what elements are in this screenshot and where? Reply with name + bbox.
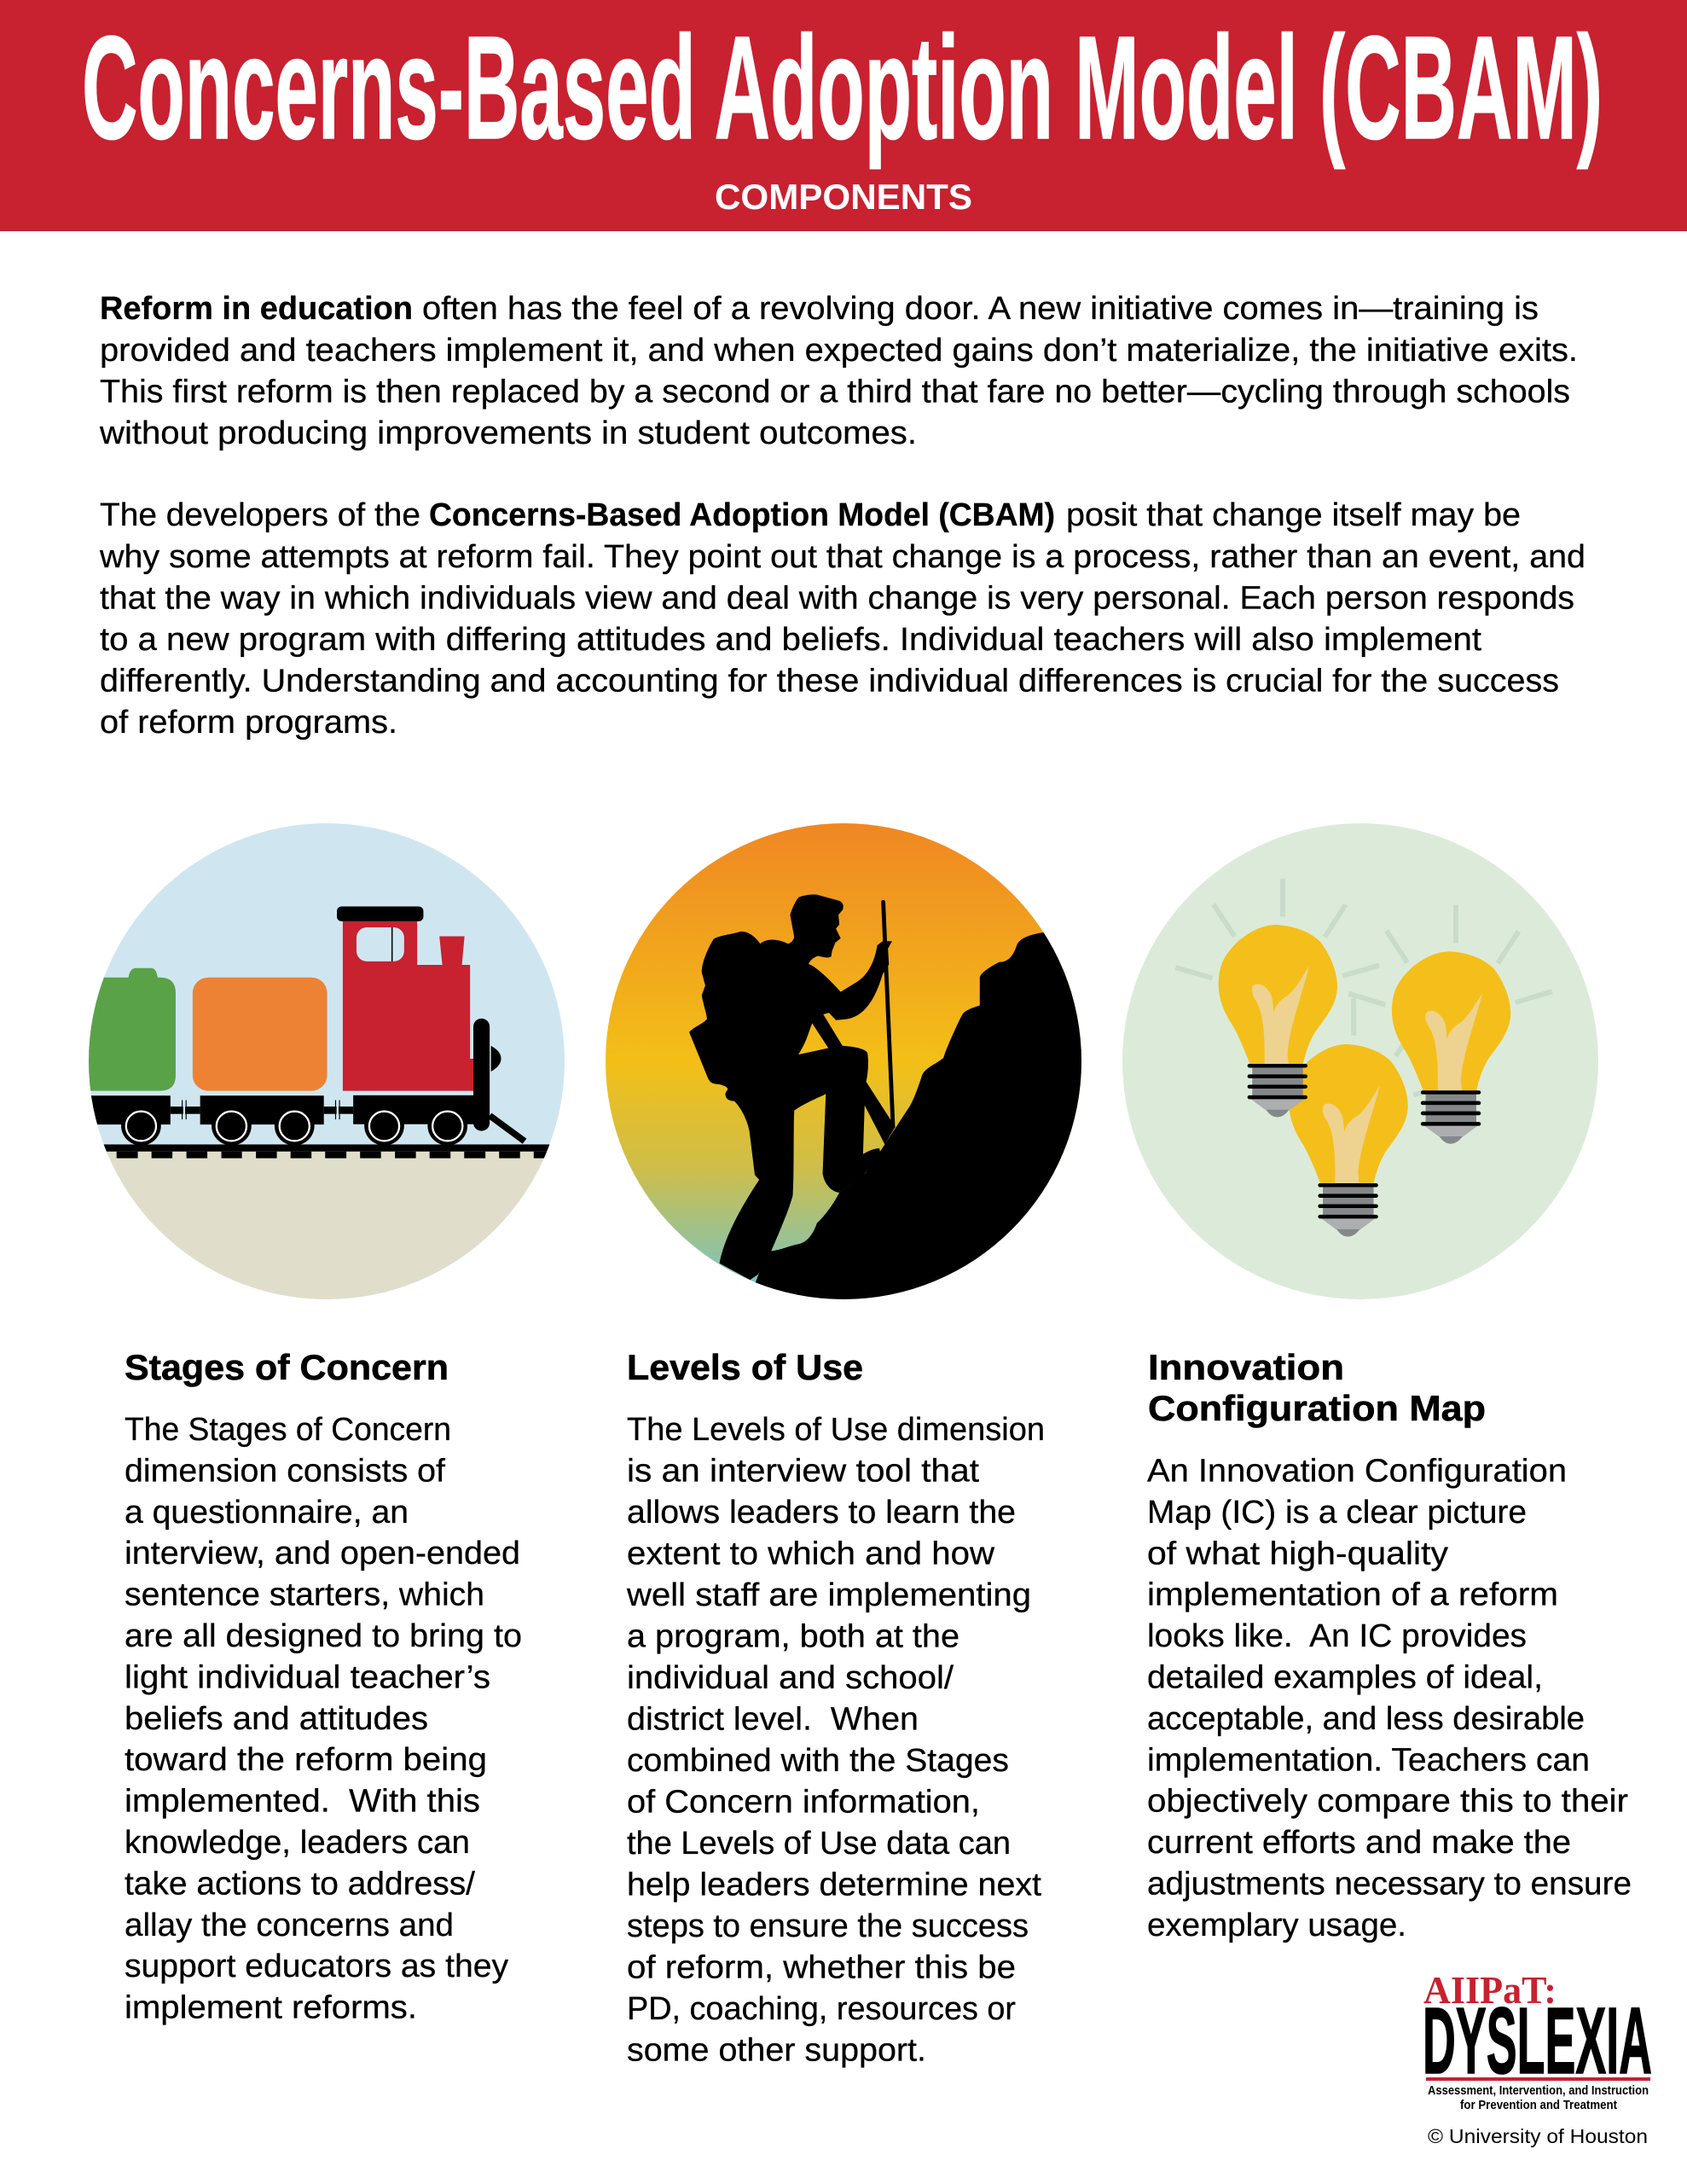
panel: innovation configuration map (1122, 823, 1632, 1943)
text: innovation configuration map body: implementation. Teachers can (1147, 1742, 1590, 1778)
text: innovation configuration map body: exemplary usage. (1147, 1908, 1406, 1943)
copyright: © University of Houston (1428, 2125, 1648, 2147)
text: stages of concern body: The Stages of Concern (125, 1412, 451, 1448)
text: levels of use body (626, 1412, 1045, 2068)
text: stages of concern body (125, 1412, 522, 2026)
intro paragraph 2: differently. Understanding and accounting for these individual differences is crucial for the success (100, 664, 1559, 700)
text: levels of use body: extent to which and how (627, 1536, 995, 1571)
text: levels of use body: PD, coaching, resources or (627, 1991, 1016, 2027)
text: levels of use body: well staff are implementing (626, 1577, 1031, 1613)
intro paragraph 2: Concerns-Based Adoption Model (CBAM) (429, 497, 1055, 533)
logo: AIIPaT Dyslexia: for Prevention and Treatment (1460, 2099, 1617, 2112)
intro paragraph 1: often has the feel of a revolving door. A new initiative comes in—training is (422, 291, 1539, 327)
text: innovation configuration map body: current efforts and make the (1147, 1825, 1571, 1861)
text: stages of concern body: a questionnaire, an (125, 1495, 409, 1531)
text: levels of use body: the Levels of Use data can (627, 1826, 1011, 1862)
text: levels of use body: The Levels of Use dimension (627, 1412, 1045, 1448)
intro paragraph 2: why some attempts at reform fail. They point out that change is a process, rather than an event, and (99, 539, 1586, 575)
heading: levels of use: Levels of Use (627, 1347, 863, 1387)
heading: innovation configuration map (1148, 1347, 1486, 1428)
text: innovation configuration map body: acceptable, and less desirable (1147, 1701, 1585, 1737)
intro paragraph 2: that the way in which individuals view and deal with change is very personal. Each person responds (100, 580, 1574, 616)
text: stages of concern body: sentence starters, which (125, 1577, 484, 1613)
text: stages of concern body: implemented. With this (125, 1784, 480, 1820)
text: levels of use body: steps to ensure the success (627, 1908, 1029, 1944)
header band (0, 0, 1687, 231)
text: stages of concern body: toward the reform being (125, 1742, 487, 1778)
text: innovation configuration map body: looks like. An IC provides (1147, 1618, 1527, 1654)
text: levels of use body: help leaders determine next (627, 1867, 1041, 1902)
text: stages of concern body: allay the concerns and (125, 1908, 454, 1943)
text: stages of concern body: are all designed to bring to (125, 1618, 522, 1654)
intro paragraph 1: This first reform is then replaced by a second or a third that fare no better—cycling through schools (100, 374, 1570, 410)
intro paragraph 2: posit that change itself may be (1066, 497, 1521, 533)
subtitle: COMPONENTS (715, 177, 972, 217)
text: stages of concern body: light individual teacher’s (125, 1659, 490, 1695)
heading: innovation configuration map: Configuration Map (1148, 1388, 1486, 1428)
heading: stages of concern: Stages of Concern (125, 1347, 449, 1387)
intro paragraph 1 (99, 291, 1578, 451)
text: levels of use body: of Concern information, (627, 1785, 980, 1821)
icon: hiker climbing (601, 823, 1117, 1305)
text: innovation configuration map body: An Innovation Configuration (1147, 1454, 1567, 1490)
intro paragraph 2 (99, 497, 1586, 741)
text: innovation configuration map body: Map (IC) is a clear picture (1147, 1495, 1527, 1531)
text: stages of concern body: implement reforms. (125, 1990, 417, 2026)
text: stages of concern body: dimension consists of (125, 1453, 445, 1489)
logo: AIIPaT Dyslexia: AIIPaT: (1423, 1968, 1557, 2012)
intro paragraph 2: of reform programs. (100, 705, 397, 741)
text: innovation configuration map body: implementation of a reform (1147, 1577, 1558, 1613)
intro paragraph 1: without producing improvements in student outcomes. (99, 415, 917, 451)
text: levels of use body: a program, both at the (627, 1619, 959, 1655)
text: levels of use body: of reform, whether this be (627, 1950, 1016, 1986)
text: stages of concern body: knowledge, leaders can (125, 1825, 470, 1861)
intro paragraph 2: to a new program with differing attitudes and beliefs. Individual teachers will also implement (100, 622, 1481, 658)
intro paragraph 1: provided and teachers implement it, and when expected gains don’t materialize, the initiative exits. (100, 333, 1578, 369)
icon: train (89, 823, 565, 1299)
text: levels of use body: combined with the Stages (627, 1743, 1009, 1779)
logo: AIIPaT Dyslexia: Assessment, Intervention, and Instruction (1428, 2084, 1649, 2098)
text: levels of use body: district level. When (627, 1701, 919, 1737)
text: innovation configuration map body: detailed examples of ideal, (1147, 1660, 1543, 1696)
intro paragraph 1: Reform in education (100, 291, 413, 327)
text: levels of use body: individual and school/ (627, 1660, 954, 1696)
text: innovation configuration map body (1147, 1454, 1632, 1943)
heading: innovation configuration map: Innovation (1148, 1347, 1344, 1387)
text: stages of concern body: take actions to address/ (125, 1866, 475, 1902)
text: innovation configuration map body: of what high-quality (1147, 1536, 1448, 1571)
panel: stages of concern (77, 819, 588, 2026)
text: levels of use body: allows leaders to learn the (627, 1495, 1016, 1531)
text: stages of concern body: support educators as they (125, 1949, 508, 1984)
intro paragraph 2: The developers of the (100, 497, 420, 533)
text: stages of concern body: beliefs and attitudes (125, 1701, 428, 1737)
text: levels of use body: is an interview tool that (627, 1454, 979, 1490)
panel: levels of use (601, 823, 1117, 2068)
text: innovation configuration map body: objectively compare this to their (1147, 1784, 1628, 1820)
text: levels of use body: some other support. (627, 2032, 926, 2068)
icon: light bulbs (1122, 823, 1598, 1299)
text: stages of concern body: interview, and open-ended (125, 1536, 520, 1571)
text: innovation configuration map body: adjustments necessary to ensure (1147, 1867, 1632, 1902)
logo: AIIPaT Dyslexia (1423, 1968, 1652, 2112)
